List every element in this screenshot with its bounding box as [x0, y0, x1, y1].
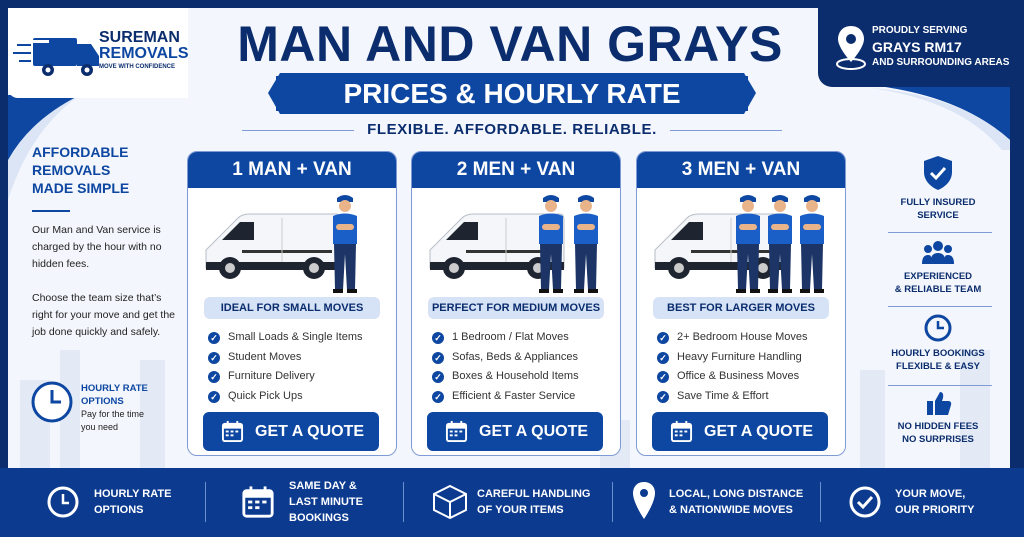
list: Student Moves: [228, 351, 301, 363]
card: 2 men + van: 1 Bedroom / Flat Moves: [452, 331, 569, 343]
card: 3 men + van: [636, 151, 846, 456]
bottom icon: box: [433, 484, 467, 520]
list: Small Loads & Single Items: [228, 331, 363, 343]
hourly rate option: [32, 382, 148, 432]
card: 2 men + van: GET A QUOTE: [479, 423, 588, 440]
bottom icon: calendar: [242, 486, 274, 518]
left intro panel: Our Man and Van service is charged by the hour with no hidden fees.: [32, 224, 162, 270]
right column features: HOURLY BOOKINGS: [891, 348, 985, 359]
hourly rate option: HOURLY RATE: [81, 383, 148, 394]
logo: MOVE WITH CONFIDENCE: [99, 64, 175, 70]
card: 2 men + van: [411, 151, 621, 456]
card: 3 men + van: Office & Business Moves: [677, 370, 799, 382]
right column features: EXPERIENCED: [904, 271, 972, 282]
right column features: NO SURPRISES: [902, 434, 974, 445]
card: 3 men + van: 2+ Bedroom House Moves: [677, 331, 808, 343]
bottom feature bar: HOURLY RATE: [94, 488, 171, 500]
card: 1 man + van: [187, 151, 397, 456]
bottom feature bar: YOUR MOVE,: [895, 488, 965, 500]
icon: clock: [924, 314, 952, 342]
card header: 1 MAN + VAN: [232, 159, 352, 180]
left intro panel: [32, 144, 175, 338]
pill: [204, 297, 380, 319]
right column features: & RELIABLE TEAM: [895, 284, 981, 295]
service area box: [818, 0, 1024, 87]
list: [208, 331, 363, 403]
subtitle banner: PRICES & HOURLY RATE: [343, 78, 681, 109]
card: 3 men + van: GET A QUOTE: [704, 423, 813, 440]
icon: thumbs up: [927, 392, 952, 415]
pill: IDEAL FOR SMALL MOVES: [221, 302, 363, 314]
card: 2 men + van: Efficient & Faster Service: [452, 390, 575, 402]
bottom feature bar: OPTIONS: [94, 504, 144, 516]
card: 2 men + van: Sofas, Beds & Appliances: [452, 351, 578, 363]
card: 2 men + van: Boxes & Household Items: [452, 370, 579, 382]
bottom feature bar: SAME DAY &: [289, 480, 357, 492]
card: 3 men + van: BEST FOR LARGER MOVES: [667, 302, 815, 314]
bottom feature bar: [0, 468, 1024, 537]
logo: [8, 8, 188, 98]
bottom icon: clock: [48, 486, 78, 518]
service area box: GRAYS RM17: [872, 39, 962, 55]
logo: REMOVALS: [99, 45, 188, 62]
left intro panel: Choose the team size that’s right for your move and get the job done quickly and safely.: [32, 292, 175, 338]
bottom feature bar: OUR PRIORITY: [895, 504, 974, 516]
card: 2 men + van: PERFECT FOR MEDIUM MOVES: [432, 302, 600, 314]
left intro panel: AFFORDABLE: [32, 144, 128, 160]
list: Quick Pick Ups: [228, 390, 303, 402]
hourly rate option: you need: [81, 422, 118, 432]
card: 3 men + van: 3 MEN + VAN: [682, 159, 800, 180]
bottom icon: check: [850, 486, 880, 518]
button: [203, 412, 379, 451]
card: 2 men + van: 2 MEN + VAN: [457, 159, 575, 180]
right column features: FLEXIBLE & EASY: [896, 361, 980, 372]
bottom icon: pin: [633, 482, 655, 519]
logo: SUREMAN: [99, 29, 180, 46]
title: MAN AND VAN GRAYS: [237, 16, 783, 72]
card header: [188, 152, 396, 188]
van illustration: [206, 195, 357, 293]
list: Furniture Delivery: [228, 370, 315, 382]
right column features: SERVICE: [917, 210, 959, 221]
subtitle banner: [268, 73, 756, 114]
icon: team: [922, 241, 954, 264]
icon: shield: [924, 156, 952, 190]
card: 3 men + van: Save Time & Effort: [677, 390, 769, 402]
left intro panel: MADE SIMPLE: [32, 180, 129, 196]
hourly rate option: OPTIONS: [81, 396, 124, 407]
hourly rate option: Pay for the time: [81, 409, 144, 419]
card: 3 men + van: Heavy Furniture Handling: [677, 351, 802, 363]
bottom feature bar: OF YOUR ITEMS: [477, 504, 564, 516]
right column features: NO HIDDEN FEES: [898, 421, 978, 432]
left intro panel: REMOVALS: [32, 162, 110, 178]
tagline: FLEXIBLE. AFFORDABLE. RELIABLE.: [367, 121, 657, 138]
bottom feature bar: CAREFUL HANDLING: [477, 488, 590, 500]
bottom feature bar: & NATIONWIDE MOVES: [669, 504, 793, 516]
right column features: [888, 156, 992, 445]
bottom feature bar: LOCAL, LONG DISTANCE: [669, 488, 803, 500]
service area box: PROUDLY SERVING AND SURROUNDING AREAS: [872, 25, 1009, 68]
bottom feature bar: BOOKINGS: [289, 512, 349, 524]
button: GET A QUOTE: [255, 423, 364, 440]
bottom feature bar: LAST MINUTE: [289, 496, 363, 508]
right column features: FULLY INSURED: [901, 197, 975, 208]
